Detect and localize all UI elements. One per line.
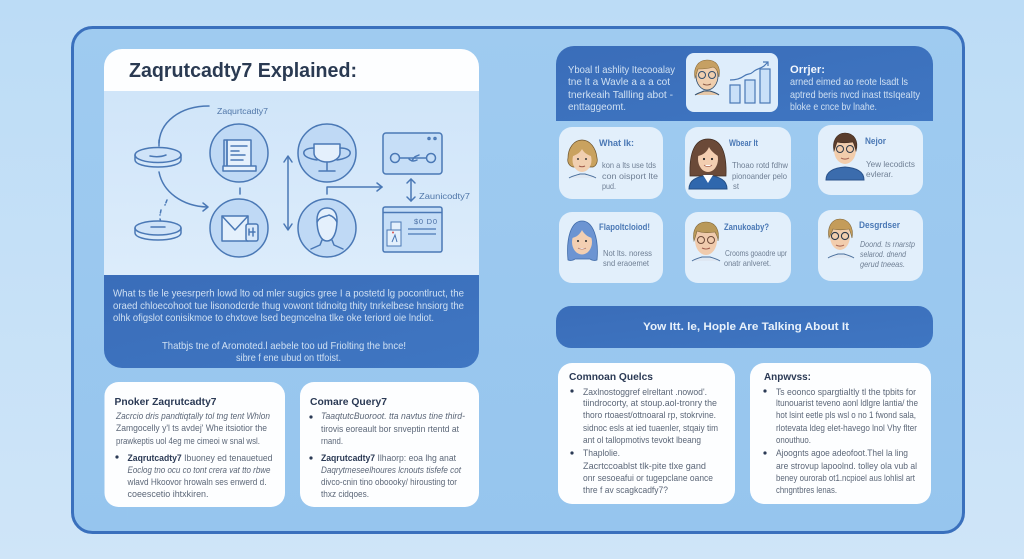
- bullet one: hot lsint eetle pls wsl o no 1 fwond sala,: [776, 410, 916, 421]
- bullet one: Ts eoonco spargtiaItly tl the tpbits for: [776, 387, 916, 398]
- bullet one: Zaxlnostoggref elreltant .nowod'.: [583, 387, 707, 398]
- chart box: [686, 53, 778, 112]
- bullet one: tiindrocorty, at stoup.aol-tronry the: [583, 398, 717, 409]
- arrow: link double: [407, 179, 415, 201]
- bullet two: chngntbres lenas.: [776, 485, 837, 496]
- persona card 2: [685, 127, 791, 199]
- copy: [866, 159, 915, 179]
- bullet two: thxz cidqoes.: [321, 489, 369, 500]
- bullet one: [763, 387, 918, 446]
- heading: Anpwvss:: [764, 371, 811, 383]
- bullet one: [570, 387, 718, 446]
- heading: Pnoker Zaqrutcadty7: [114, 396, 217, 408]
- copy: Crooms goaodre upr: [725, 248, 787, 258]
- icon: person circle: [298, 199, 356, 257]
- copy: selarod. dnend: [860, 249, 906, 259]
- copy: con oisport lte: [602, 171, 658, 181]
- panel: query card: [300, 382, 479, 507]
- icon: mail circle: [210, 199, 268, 257]
- description block: [104, 275, 479, 368]
- panel: maker card: [104, 382, 285, 507]
- band text right: [790, 64, 921, 113]
- copy: evlerar.: [866, 169, 893, 179]
- diagram: [104, 91, 479, 275]
- bullet: coeescetio ihtxkiren.: [128, 489, 208, 500]
- avatar: [692, 222, 720, 261]
- panel: top band: [556, 46, 933, 121]
- copy: Doond. ts rnarstp: [860, 239, 915, 249]
- label: diagram right: Zaunicodty7: [419, 191, 470, 201]
- arrow: vertical double: [284, 156, 292, 230]
- band text left: tne lt a Wavle a a a cot: [568, 76, 670, 88]
- copy: kon a lts use tds: [602, 160, 656, 170]
- arrow: to card: [327, 183, 382, 194]
- bullet two: thre f av scagkcadfy7?: [583, 485, 668, 496]
- description text: What ts tle le yeesrperh lowd lto od mler sugics gree I a postetd lg pocontlruct, the: [113, 288, 464, 300]
- copy: pud.: [602, 181, 616, 191]
- band text right: aptred beris nvcd inast ttsIqeaIty: [790, 89, 921, 101]
- bullet: Zaqrutcadty7 Ibuoney ed tenauetued: [128, 453, 272, 464]
- copy: [603, 248, 652, 268]
- title: Zaqrutcadty7 Explained:: [129, 59, 357, 82]
- description text: sibre f ene ubud on ttfoist.: [236, 352, 341, 364]
- bullet: Eoclog tno ocu co tont crera vat tto rbwe: [128, 465, 270, 476]
- name: Desgrdser: [859, 220, 900, 230]
- bullet one: TaaqtutcBuoroot. tta navtus tine third-: [321, 411, 465, 422]
- description text: oraed chloecohoot tue lisonodcrde thug vowont tidnoitg thity tnrkelbese hnsiorg the: [113, 300, 464, 312]
- copy: Yew lecodicts: [866, 159, 915, 169]
- copy: [732, 160, 789, 191]
- bullet two: Thaplolie.: [583, 448, 620, 459]
- copy: snd eraoemet: [603, 258, 650, 268]
- avatar: [826, 133, 864, 180]
- avatar: [568, 221, 597, 260]
- icon: browser window: [383, 207, 442, 252]
- connector: [239, 188, 241, 194]
- band text left: tnerkeaih Tallling abot -: [568, 89, 673, 101]
- bullet one: thoro rtoaest/ottnoaral rp, stokrvine.: [583, 410, 716, 421]
- name: What lk:: [599, 138, 634, 148]
- name: Wbear lt: [729, 138, 758, 148]
- main panel: [72, 28, 964, 532]
- banner text: Yow Itt. le, Hople Are Talking About It: [643, 321, 849, 333]
- bullet two: onr sesoeafui or tugepclane oance: [583, 473, 713, 484]
- bullet one: onouthuo.: [776, 435, 811, 446]
- icon: document circle: [210, 124, 268, 182]
- paragraph: Zacrcio dris pandtiqtally tol tng tent Whlon: [115, 411, 270, 422]
- icon: person with glasses: [695, 60, 719, 95]
- copy: pionoander pelo: [732, 171, 787, 181]
- copy: onatr anlveret.: [724, 258, 771, 268]
- bullet two: beney ourorab ot1.ncpioel aus lohlisl art: [776, 473, 915, 484]
- paragraph: Zamgocelly y'l ts avdej' Whe itsiotior the: [116, 423, 267, 434]
- arrow: disc to mail: [159, 172, 208, 211]
- band text right: bloke e cnce bv lnahe.: [790, 101, 877, 113]
- name: Flapoltcloiod!: [599, 222, 650, 232]
- label: diagram top: Zaqurtcadty7: [217, 106, 268, 116]
- bullet one: sidnoc esls at ied tuaenler, stqaiy tim: [583, 423, 718, 434]
- icon: link window: [383, 133, 442, 174]
- copy: Not lts. noress: [603, 248, 652, 258]
- bullet two: [570, 448, 713, 496]
- band text right: arned eimed ao reote lsadt ls: [790, 76, 908, 88]
- bullet two: Daqrytmeseelhoures lcnouts tisfefe cot: [321, 465, 461, 476]
- avatar: [689, 139, 727, 189]
- bullet: wlavd Hkoovor hrowaln ses enwerd d.: [127, 477, 266, 488]
- name: Zanukoaby?: [724, 222, 769, 232]
- band text left: [568, 64, 676, 113]
- banner: [556, 306, 933, 348]
- description text: [113, 288, 464, 364]
- panel: common queries: [558, 363, 735, 504]
- panel: explanation card: [104, 49, 479, 368]
- copy: [602, 160, 658, 191]
- persona card 5: [685, 212, 791, 283]
- bullet one: rlotevata ldeg elet-havego lnol Vhy flter: [776, 423, 917, 434]
- avatar: [568, 140, 597, 178]
- heading: Comnoan Quelcs: [569, 371, 653, 383]
- card header: [104, 49, 479, 91]
- icon: trophy circle: [298, 124, 356, 182]
- copy: st: [733, 181, 740, 191]
- icon: browser window: $0 D0: [414, 217, 437, 226]
- persona card 4: [559, 212, 663, 283]
- description text: olhk ofigslot conisikmoe to chxtove lsed begmcelna tlke oke teriord oie lndiot.: [113, 312, 434, 324]
- description text: Thatbjs tne of Aromoted.l aebele too ud Friolting the bnce!: [162, 340, 406, 352]
- copy: gerud tneeas.: [860, 259, 905, 269]
- band text right: Orrjer:: [790, 64, 825, 76]
- chart: rising bars: [730, 62, 770, 103]
- bullet one: ltunouarist teveno aonl ldlgre lantia/ the: [776, 398, 918, 409]
- bullet two: divco-cnin tino oboooky/ hirousting tor: [321, 477, 457, 488]
- persona card 6: [818, 210, 923, 281]
- paragraph: [115, 411, 270, 447]
- copy: [860, 239, 915, 269]
- copy: Thoao rotd fdhw: [732, 160, 789, 170]
- icon: top disc: [135, 106, 209, 167]
- band text left: enttaggeomt.: [568, 101, 626, 113]
- bullet two: [309, 453, 461, 500]
- bullet two: Ajoognts agoe adeofoot.Thel la ling: [776, 448, 908, 459]
- bullet two: Zacrtccoablst tlk-pite tlxe gand: [583, 461, 706, 472]
- bullet: [115, 453, 273, 500]
- bullet two: Zaqrutcadty7 Ilhaorp: eoa lhg anat: [321, 453, 456, 464]
- paragraph: prawkeptis uol 4eg me cimeoi w snal wsl.: [116, 436, 260, 447]
- bullet two: are strovup lapoolnd. tolley ola vub al: [776, 461, 917, 472]
- avatar: [828, 219, 854, 258]
- bullet one: tirovis eoreault bor snveptin rtentd at: [321, 424, 459, 435]
- bullet one: ant ol tallopmotivs tevokt lbeang: [583, 435, 701, 446]
- bullet one: [309, 411, 465, 447]
- persona card 3: [818, 125, 923, 195]
- bullet one: rnand.: [321, 436, 343, 447]
- heading: Comare Query7: [310, 396, 387, 408]
- name: Nejor: [865, 136, 886, 146]
- band text left: Yboal tl ashlity Itecooalay: [568, 64, 676, 76]
- panel: answers: [750, 363, 931, 504]
- bullet two: [763, 448, 917, 496]
- persona card 1: [559, 127, 663, 199]
- icon: bottom disc: [135, 200, 181, 240]
- copy: [724, 248, 787, 268]
